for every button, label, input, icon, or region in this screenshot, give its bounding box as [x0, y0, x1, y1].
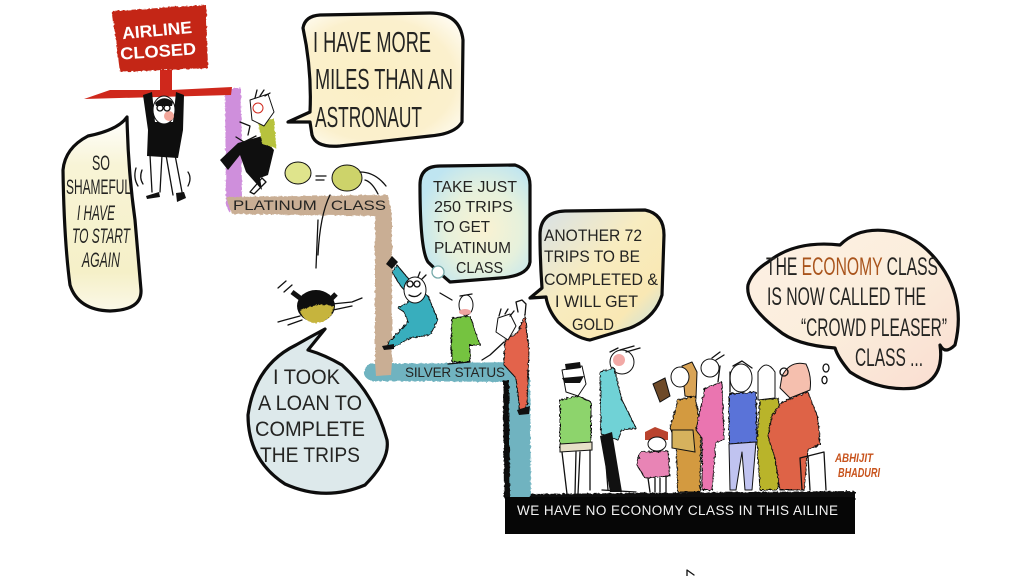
bubble text: COMPLETED & [544, 270, 659, 289]
passenger: person in pink [696, 352, 724, 490]
trousers [729, 442, 756, 490]
bubble text: TRIPS TO BE [544, 247, 640, 266]
passenger: man with moustache [560, 362, 592, 494]
ground line [530, 491, 855, 500]
bubble outline [288, 13, 463, 146]
passenger: woman in olive [757, 365, 782, 490]
bubble text [313, 27, 453, 134]
bubble: another 72 trips [530, 210, 664, 340]
bubble text: TO START [72, 225, 131, 248]
cloud left [285, 162, 311, 184]
step: silver ledge [364, 362, 531, 498]
staircase: status steps [225, 88, 531, 498]
bubble text: PLATINUM [434, 240, 511, 257]
red suit [504, 315, 529, 412]
bubble text: TO GET [434, 219, 490, 236]
speed lines [316, 172, 386, 268]
trousers [562, 450, 590, 494]
hair [418, 272, 426, 279]
bubble text: COMPLETE [255, 418, 365, 441]
banner: no economy class [505, 497, 855, 534]
bubble outline [420, 165, 530, 282]
olive dress [757, 398, 782, 490]
arms [278, 298, 362, 325]
sign text [120, 18, 197, 64]
head [701, 359, 719, 377]
head [250, 94, 274, 126]
body [451, 316, 480, 362]
bubble text: SO [92, 152, 110, 175]
figure: man climbing with green shirt [220, 90, 276, 194]
hair [255, 90, 270, 98]
hair and arm [440, 293, 472, 364]
green shirt [560, 396, 591, 450]
eye [253, 103, 263, 113]
passenger: child with doll [637, 427, 670, 492]
glasses [157, 105, 170, 111]
red suit [768, 392, 820, 490]
blue jacket [729, 392, 757, 444]
head [153, 96, 175, 124]
figure: man hanging from bar [135, 92, 190, 202]
face [648, 437, 666, 451]
bubble: I have more miles [288, 13, 463, 146]
bubble outline [248, 329, 387, 493]
head [610, 350, 634, 374]
step: dark wall edge [503, 380, 510, 498]
bubble text: I TOOK [273, 366, 340, 389]
sign text: AIRLINE [121, 18, 193, 43]
passenger: woman in ochre [653, 362, 701, 492]
figure: climber in teal [382, 256, 438, 350]
head [562, 366, 586, 396]
hands and shoe [382, 256, 398, 350]
bubble text: THE ECONOMY CLASS [766, 253, 938, 281]
bubble text: CLASS [456, 260, 503, 277]
arm and shoe [482, 342, 504, 360]
head [404, 277, 426, 303]
small tail circle [432, 266, 444, 278]
arms and shoe [236, 122, 266, 194]
moustache and hair [562, 362, 584, 383]
legs [292, 292, 336, 300]
suitcase [800, 452, 826, 490]
body [143, 92, 184, 158]
bag [672, 430, 695, 452]
bubble: take just 250 trips [420, 165, 530, 282]
label: silver status: SILVER STATUS [405, 365, 505, 380]
figure: man falling [278, 281, 362, 325]
passenger: man in teal shirt [600, 346, 640, 492]
bubble text: 250 TRIPS [434, 199, 513, 216]
cloud outline [748, 230, 958, 389]
belt [560, 442, 592, 452]
hair [730, 361, 752, 392]
signature: ABHIJIT [834, 451, 874, 465]
stray cursor mark [687, 570, 694, 576]
bubble text: TAKE JUST [433, 179, 517, 196]
cap [645, 427, 668, 440]
teal suit [387, 265, 438, 348]
passenger: person in blue [729, 361, 757, 490]
head [496, 314, 516, 340]
bubble: so shameful [63, 117, 141, 311]
cloud right [332, 165, 362, 191]
head [780, 363, 810, 398]
raised hand [516, 300, 526, 315]
glasses [780, 368, 788, 376]
bubble: economy class thought cloud [748, 230, 958, 389]
icon: green smoke clouds [285, 162, 386, 268]
signature: BHADURI [838, 465, 880, 480]
hair [610, 346, 640, 352]
legs [648, 476, 666, 492]
shirt [600, 368, 636, 440]
banner background [505, 497, 855, 534]
figure: man in red climbing [482, 300, 530, 415]
crowd: economy passengers [530, 346, 855, 500]
bubble: I took a loan [248, 329, 387, 493]
yellow shirt [300, 305, 334, 323]
pants [220, 136, 274, 190]
legs [150, 155, 182, 195]
label: platinum class: PLATINUM CLASS [233, 197, 386, 213]
sign text: CLOSED [120, 39, 197, 64]
thought dots [822, 364, 829, 384]
hair [682, 362, 697, 398]
shoe [517, 406, 530, 415]
face [730, 364, 752, 392]
head [459, 295, 473, 315]
passenger: large man in red [768, 363, 829, 490]
shirt [258, 118, 276, 148]
bubble text [544, 226, 659, 334]
body [297, 290, 335, 322]
step: purple top wall [225, 88, 242, 212]
bubble text [433, 179, 517, 277]
bubble text: I HAVE MORE [313, 27, 431, 59]
sign board [112, 5, 208, 72]
hair [712, 352, 724, 382]
black trousers [600, 432, 622, 492]
coat [670, 396, 701, 492]
bubble text [255, 366, 365, 467]
banner text: WE HAVE NO ECONOMY CLASS IN THIS AILINE [517, 503, 838, 518]
shoes [146, 192, 186, 202]
motion marks [278, 281, 292, 292]
leg line [602, 438, 636, 492]
bubble text: AGAIN [81, 249, 120, 272]
face [671, 367, 689, 387]
head and hair [758, 365, 775, 400]
cheek [613, 354, 625, 366]
cheek [459, 309, 471, 315]
bubble text: IS NOW CALLED THE [767, 283, 926, 311]
bubble outline [530, 210, 664, 340]
glasses [407, 281, 421, 297]
figure: man with green sweater [440, 293, 480, 364]
cheek [164, 111, 174, 121]
bubble text: CLASS ... [855, 344, 923, 372]
bubble text: SHAMEFUL [66, 176, 131, 199]
bubble outline [63, 117, 141, 311]
bubble text: A LOAN TO [258, 392, 362, 415]
pink dress [637, 451, 670, 478]
brown step overlap [375, 362, 392, 376]
step: platinum ledge [226, 195, 392, 376]
sign: airline closed [84, 5, 232, 99]
bubble text [766, 253, 947, 372]
pink coat [696, 382, 724, 490]
hair [499, 309, 514, 316]
sign post and bar [84, 70, 232, 99]
motion lines [135, 168, 190, 186]
bubble text: ANOTHER 72 [544, 226, 642, 245]
bubble text [66, 152, 131, 272]
phone [653, 378, 670, 402]
bubble text: ASTRONAUT [315, 102, 422, 134]
bubble text: MILES THAN AN [315, 64, 453, 96]
bubble text: I WILL GET [555, 292, 638, 311]
bubble text: THE TRIPS [260, 444, 360, 467]
face detail [155, 98, 173, 106]
bubble text: I HAVE [77, 202, 116, 225]
signature [834, 451, 880, 480]
bubble text: GOLD [572, 315, 614, 334]
